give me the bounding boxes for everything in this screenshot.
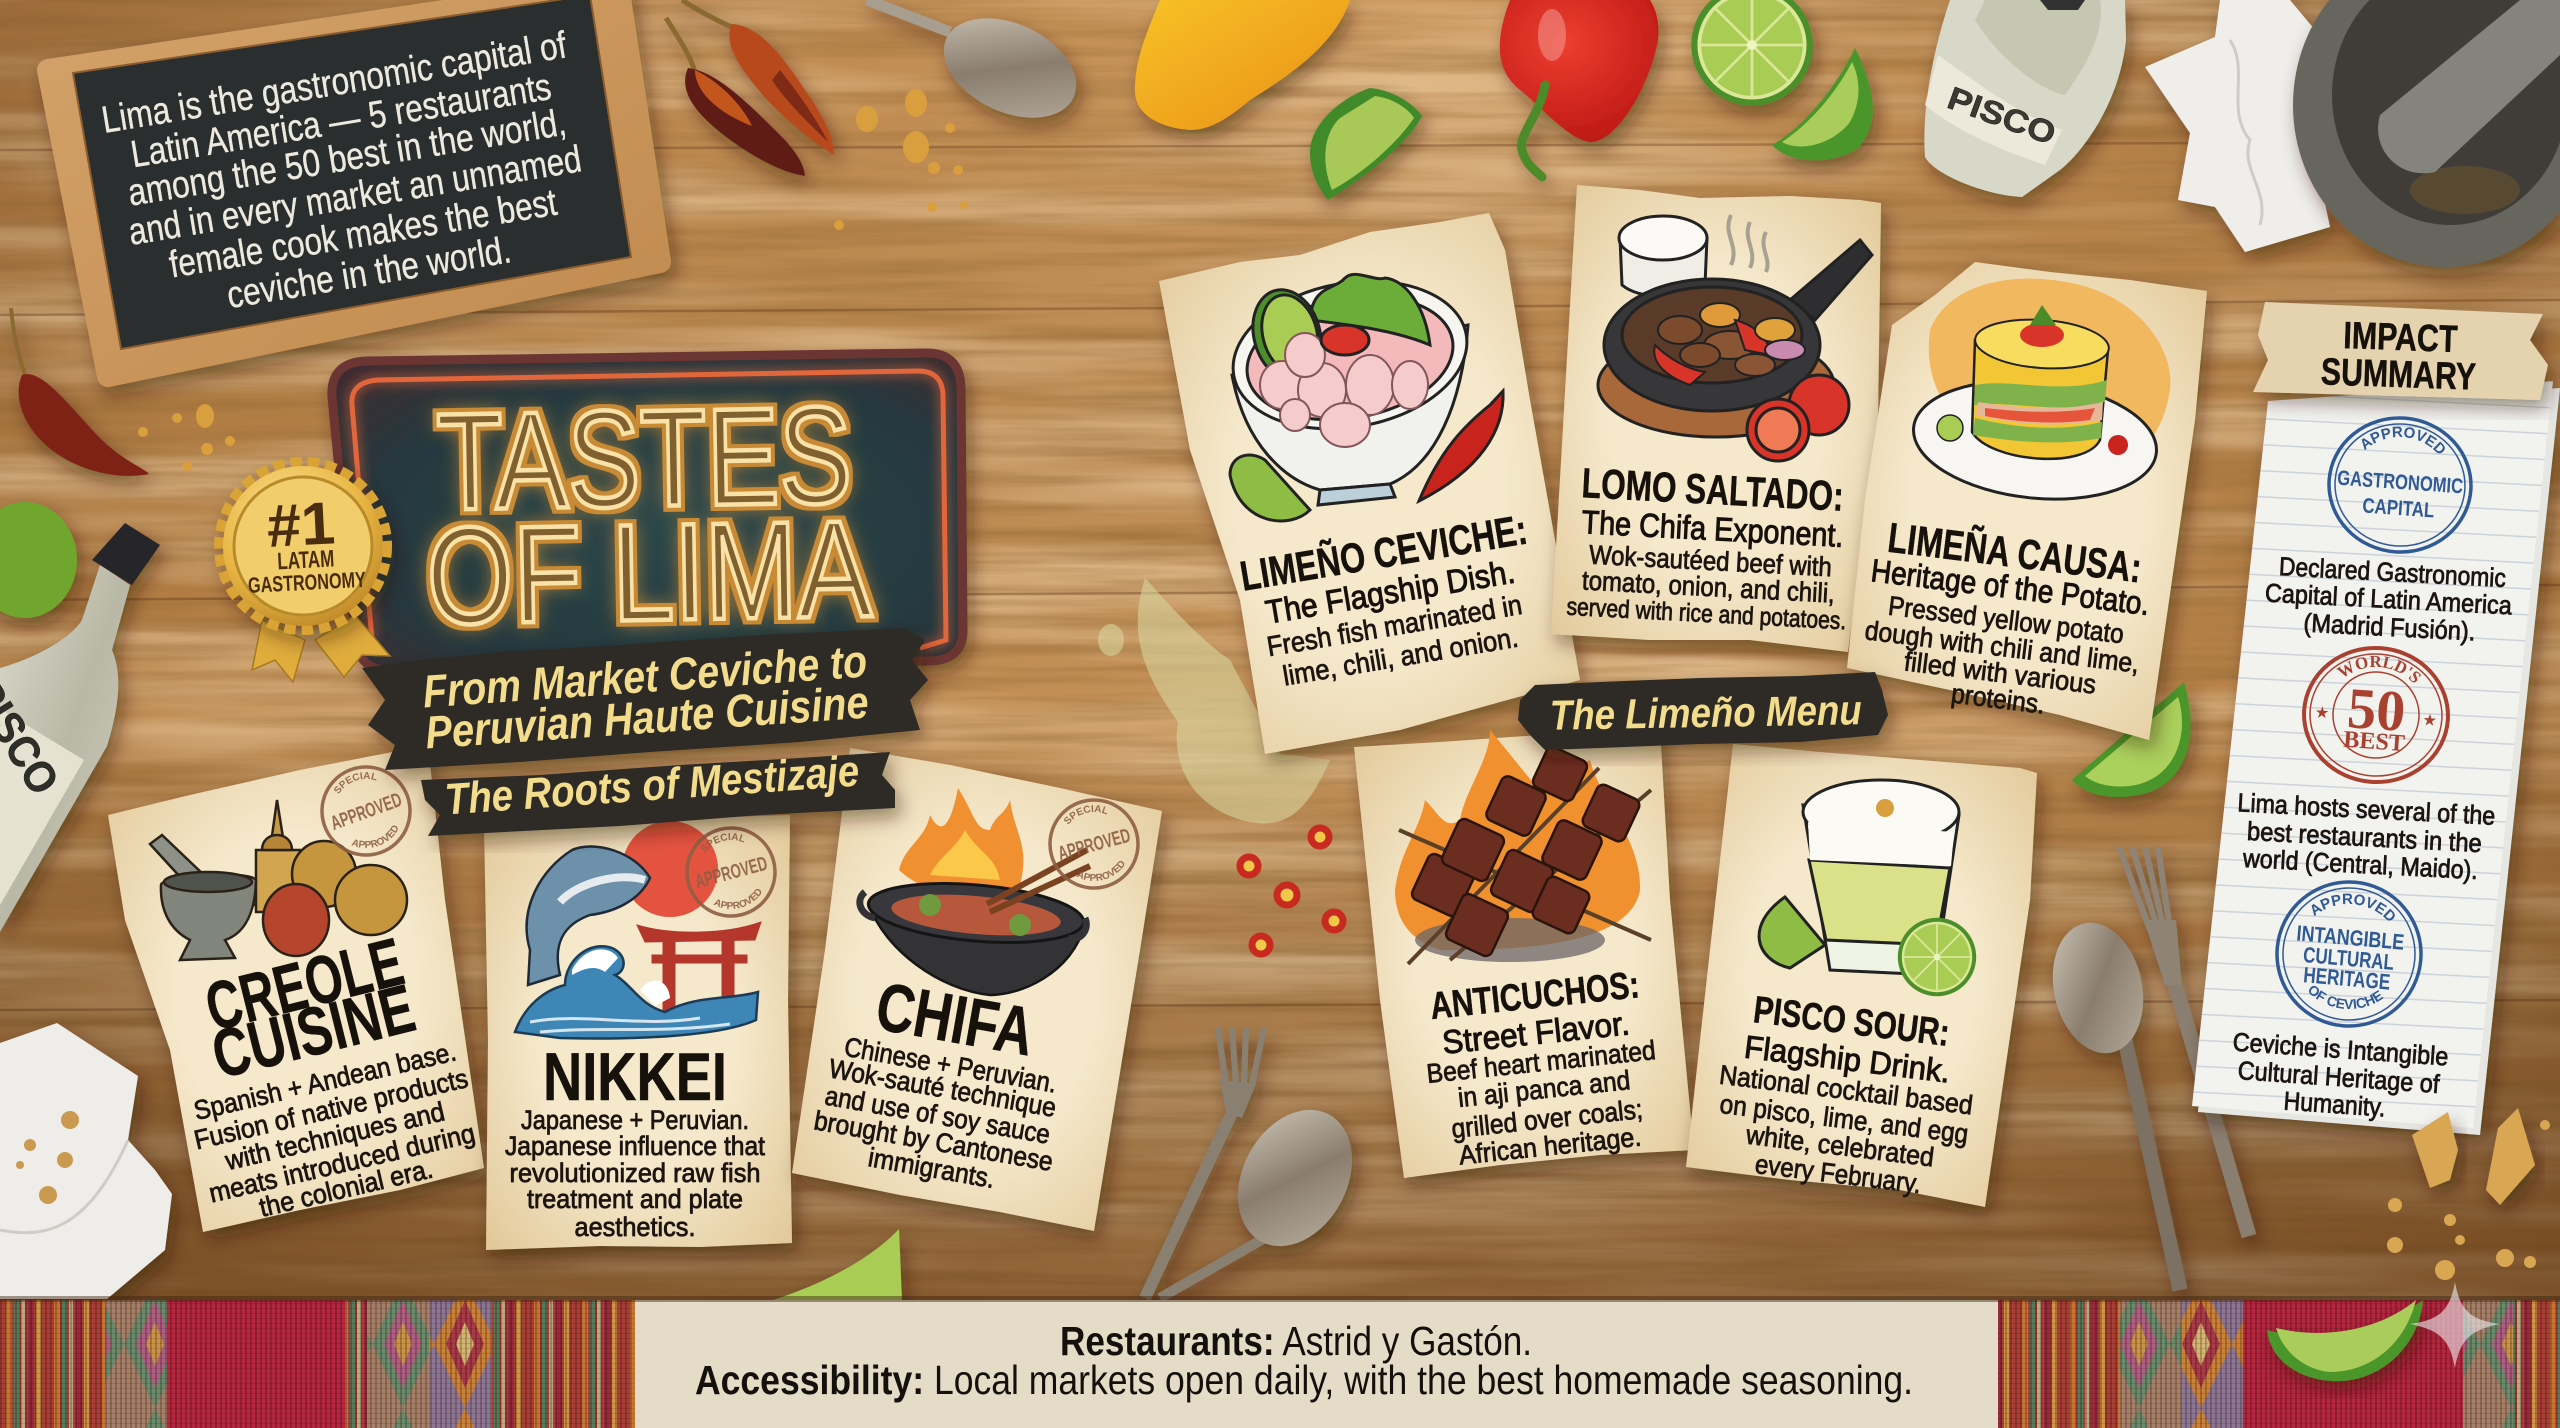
summary tape heading: SUMMARY [2320,351,2477,399]
title: CUISINE [205,970,422,1093]
description: on pisco, lime, and egg [1718,1089,1970,1149]
description: meats introduced during [206,1118,478,1208]
paper [1847,262,2207,740]
lime slice top [1691,0,1813,106]
description: revolutionized raw fish [510,1158,760,1188]
paper [1686,744,2037,1207]
summary text 2 [2237,787,2496,885]
summary text 2: world (Central, Maido). [2241,843,2479,885]
stamp: intangible heritage: CULTURAL [2302,942,2395,975]
description: aesthetics. [574,1212,696,1242]
chalk text: female cook makes the best [166,182,560,287]
summary text 3: Cultural Heritage of [2237,1055,2441,1099]
title: LIMEÑO CEVICHE: [1237,506,1530,600]
description: served with rice and potatoes. [1566,593,1847,635]
stamp [1040,790,1148,898]
summary text 3: Ceviche is Intangible [2232,1027,2449,1072]
chalk text: ceviche in the world. [224,229,514,317]
description: Fusion of native products [191,1063,471,1155]
icon: wok and flame [860,788,1090,995]
lime wedge bottom center [773,1229,902,1300]
paper [792,748,1162,1231]
footer text [695,1318,1913,1403]
title: CHIFA [871,968,1039,1070]
card: limeña causa [1847,262,2207,740]
woven strip right [1998,1300,2560,1428]
title text: TASTES [435,378,853,540]
bottle label text: PISCO [1943,80,2061,152]
stamp: SPECIAL [1064,805,1107,824]
mortar top right [2293,0,2560,267]
section banner: the roots of mestizaje: The Roots of Mestizaje [443,747,861,824]
description: Spanish + Andean base. [191,1036,459,1126]
description: proteins. [1950,678,2047,720]
badge text: LATAM [277,545,335,575]
crumbs top [834,89,968,230]
title: CREOLE [198,924,411,1046]
title: NIKKEI [543,1039,727,1115]
icon: lime slice [1898,918,1976,996]
icon: fish, waves and torii [515,821,761,1038]
dried chilis top [666,0,834,176]
description [812,1032,1059,1194]
description [1718,1060,1974,1199]
lime wedge flesh 1 [1325,96,1414,190]
footer text: Accessibility: Local markets open daily, with the best homemade seasoning. [695,1357,1913,1403]
subtitle banner: From Market Ceviche to [421,635,869,717]
paper [1551,185,1881,652]
summary text 3 [2232,1027,2449,1123]
icon: mortar, church and potatoes [150,800,407,960]
card: chifa [792,748,1162,1231]
spoon top [867,0,1092,137]
sign panel [332,353,963,670]
summary tape heading [2253,302,2548,400]
fork and spoon bottom center [1145,1028,1375,1298]
badge text [243,488,367,598]
description [1265,589,1524,692]
card: lomo saltado [1551,185,1881,652]
stamp [685,826,777,918]
lime wedge footer [2267,1300,2423,1381]
description: Wok-sauté technique [827,1053,1058,1123]
description: Pressed yellow potato [1887,591,2126,649]
description: lime, chili, and onion. [1281,622,1520,692]
description [505,1105,765,1242]
description: tomato, onion, and chili, [1581,565,1836,609]
icon: skewers [1395,730,1651,964]
description: and use of soy sauce [823,1081,1052,1150]
stamp: intangible heritage: INTANGIBLE [2296,920,2405,955]
summary text 1: Capital of Latin America [2264,578,2513,620]
summary text 1: (Madrid Fusión). [2303,608,2476,646]
card: pisco sour [1686,744,2037,1207]
chili rings [1240,828,1343,954]
summary text 3: Humanity. [2283,1086,2387,1123]
stamp: intangible heritage: OF CEVICHE [2308,986,2384,1009]
subtitle: The Flagship Dish. [1263,553,1517,631]
stamp: world's 50 best: BEST [2343,727,2406,757]
stamp: APPROVED [693,853,770,893]
chalk text [99,24,584,317]
cream panel [635,1300,1998,1428]
chalk text: Latin America — 5 restaurants [128,66,554,176]
description: with techniques and [222,1096,447,1176]
paper [484,815,792,1250]
description [1566,540,1847,635]
stamp: intangible heritage: APPROVED [2312,894,2395,920]
napkin top right [2145,0,2330,252]
subtitle banner: Peruvian Haute Cuisine [424,676,870,758]
stamp: gastronomic capital: CAPITAL [2362,494,2435,522]
title: ANTICUCHOS: [1428,964,1641,1028]
title: PISCO SOUR: [1751,989,1952,1055]
stamp: intangible heritage: HERITAGE [2302,962,2391,995]
icon: ceviche bowl [1221,264,1503,521]
footer text: Restaurants: Astrid y Gastón. [1060,1318,1532,1364]
mango [1135,0,1350,130]
description: the colonial era. [256,1154,436,1223]
subtitle: Flagship Drink. [1742,1029,1952,1090]
badge text: GASTRONOMY [247,567,367,598]
stamp: gastronomic capital: GASTRONOMIC [2337,467,2464,498]
description [191,1036,478,1223]
icon: pisco sour [1759,780,1959,975]
lime left [0,502,77,618]
description: white, celebrated [1744,1120,1936,1172]
stamp: gastronomic capital: APPROVED [2362,426,2445,454]
ribbons [252,615,390,682]
summary text 1 [2264,551,2513,646]
summary text 2: Lima hosts several of the [2237,787,2496,831]
stamp: APPROVED [328,789,405,835]
stamp: world's 50 best: WORLD'S [2336,656,2421,682]
red bell pepper [1500,0,1658,177]
icon: skillet [1598,216,1872,461]
dried chili left [11,308,149,476]
paper [1354,728,1694,1178]
description: treatment and plate [527,1184,743,1214]
medal [221,464,385,628]
stamp: world's 50 best: ★ [2315,705,2329,722]
card: anticuchos [1354,728,1694,1178]
stamp: APPROVED [1076,860,1124,881]
title: LIMEÑA CAUSA: [1885,514,2144,591]
badge text: #1 [265,489,337,560]
description: Japanese influence that [505,1131,765,1161]
subtitle: Heritage of the Potato. [1869,552,2151,622]
description: dough with chili and lime, [1863,615,2141,679]
stamp: world's 50 best: 50 [2345,675,2408,744]
neon title sign [332,353,963,670]
stamp: APPROVED [714,888,762,909]
subtitle: The Chifa Exponent. [1581,503,1844,554]
stamp: SPECIAL [334,772,376,794]
stamp: gastronomic capital [2327,416,2473,554]
woven strip left [0,1300,635,1428]
title [198,924,422,1093]
summary paper [2192,381,2560,1135]
napkin left [0,1023,172,1299]
banner: the limeño menu: The Limeño Menu [1549,686,1862,739]
sparkle mark [2410,1282,2500,1368]
description: Beef heart marinated [1425,1035,1657,1089]
description: immigrants. [866,1142,997,1194]
description: brought by Cantonese [812,1105,1055,1177]
title text: OF LIMA [425,492,873,654]
wine spill stain [1098,578,1330,823]
lime wedge top 1 [1310,88,1422,200]
title text [425,378,873,654]
title: LOMO SALTADO: [1581,459,1845,520]
lime wedge right [2072,682,2191,797]
crumbs left [138,404,235,471]
subtitle banner [362,628,928,770]
paper [108,745,484,1232]
stamp [320,765,412,857]
description: in aji panca and [1456,1065,1632,1113]
lime wedge flesh 2 [1782,62,1858,146]
card: creole cuisine [105,752,487,1248]
description [1863,591,2141,720]
stamp: APPROVED [352,826,398,848]
icon: causa tower [1908,279,2170,510]
lime wedge top 2 [1772,48,1873,160]
stamp: APPROVED [1056,825,1133,865]
footer [0,1296,2560,1428]
description: Chinese + Peruvian. [842,1032,1059,1099]
stamp: SPECIAL [701,833,744,852]
cutlery right [2041,847,2249,1290]
chalkboard [48,0,660,376]
crackers and crumbs right [2387,1108,2550,1280]
gold badge [221,464,390,682]
stamp: world's 50 best [2302,646,2450,784]
pisco bottle left [0,523,160,932]
description: Fresh fish marinated in [1265,589,1524,662]
wood frame [48,0,660,376]
neon frame [352,371,946,648]
paper [1159,213,1580,754]
chalk text: Lima is the gastronomic capital of [99,24,570,142]
card: nikkei [478,815,807,1268]
description: every February. [1753,1149,1923,1199]
pisco bottle top [1924,0,2126,197]
description: grilled over coals; [1450,1094,1644,1144]
description [1425,1035,1657,1171]
card: limeño ceviche [1159,213,1580,754]
subtitle: Street Flavor. [1440,1004,1631,1061]
chalk text: among the 50 best in the world, [125,102,569,215]
description: Japanese + Peruvian. [521,1105,749,1135]
stamp: intangible heritage [2275,880,2423,1028]
steam [1728,215,1768,272]
description: Wok-sautéed beef with [1588,540,1833,582]
description: National cocktail based [1718,1060,1974,1120]
summary text 2: best restaurants in the [2246,816,2483,858]
banner: the limeño menu [1518,672,1888,750]
summary text 1: Declared Gastronomic [2278,551,2507,593]
summary tape heading: IMPACT [2343,315,2458,361]
chalk text: and in every market an unnamed [126,138,584,254]
description: African heritage. [1457,1122,1643,1171]
slate [73,0,631,349]
stamp: world's 50 best: ★ [2423,712,2437,729]
description: filled with various [1902,646,2098,700]
